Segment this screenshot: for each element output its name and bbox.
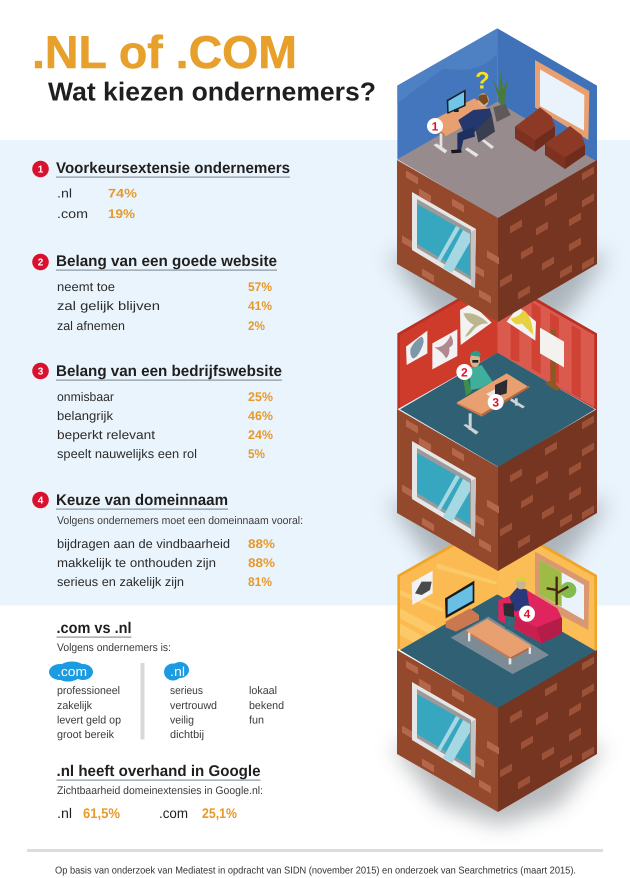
wall art left bbox=[406, 331, 427, 365]
desk bbox=[430, 98, 494, 157]
row belangrijk: 46% bbox=[248, 409, 273, 423]
heading 3: Belang van een bedrijfswebsite bbox=[56, 363, 282, 380]
badge 1 bbox=[32, 161, 49, 177]
row onthouden: 88% bbox=[248, 556, 275, 570]
easel bbox=[540, 328, 564, 391]
row speelt nauwelijks een rol: 5% bbox=[248, 447, 265, 461]
stat .com: 25,1% bbox=[202, 805, 237, 821]
heading Google: .nl heeft overhand in Google bbox=[56, 763, 261, 780]
.nl traits column 2: fun bbox=[249, 714, 264, 726]
row zakelijk bbox=[57, 575, 272, 589]
.com traits: levert geld op bbox=[57, 714, 121, 726]
intro text: Volgens ondernemers moet een domeinnaam vooral: bbox=[57, 515, 303, 527]
section 2: Belang van een goede website bbox=[32, 253, 277, 333]
.nl traits column 1: veilig bbox=[170, 714, 194, 726]
.nl traits column 1: dichtbij bbox=[170, 729, 204, 741]
row vindbaarheid: bijdragen aan de vindbaarheid bbox=[57, 537, 230, 551]
room walls and floor bbox=[397, 276, 597, 467]
row onmisbaar bbox=[57, 390, 273, 404]
row zal afnemen: 2% bbox=[248, 319, 265, 333]
window with tree bbox=[535, 552, 589, 630]
brick base bbox=[397, 650, 597, 812]
row neemt toe bbox=[57, 280, 272, 294]
.com cloud label bbox=[49, 662, 93, 682]
.com traits: zakelijk bbox=[57, 700, 92, 712]
.nl traits column 1: serieus bbox=[170, 685, 203, 697]
cube 2: office with art bbox=[397, 276, 597, 571]
person bbox=[463, 351, 493, 396]
badge 3 bbox=[32, 363, 49, 379]
sofa bbox=[498, 590, 562, 643]
row zakelijk: serieus en zakelijk zijn bbox=[57, 575, 184, 589]
brick base bbox=[397, 160, 597, 322]
row .com: 19% bbox=[108, 207, 135, 221]
title line 1: .NL of .COM bbox=[32, 26, 297, 78]
brick base bbox=[397, 409, 597, 571]
armchair right bbox=[545, 126, 585, 169]
rug bbox=[451, 617, 549, 674]
number marker 4: 4 bbox=[524, 607, 530, 621]
section 1: Voorkeursextensie ondernemers bbox=[32, 160, 290, 221]
footer rule bbox=[27, 849, 603, 852]
number marker 3: 3 bbox=[492, 395, 499, 409]
row onthouden: makkelijk te onthouden zijn bbox=[57, 556, 216, 570]
badge 4 bbox=[32, 492, 49, 508]
.nl traits column 2 bbox=[249, 685, 284, 726]
.com cloud label: .com bbox=[57, 664, 87, 679]
number marker 3 bbox=[488, 394, 504, 410]
.com traits: groot bereik bbox=[57, 729, 114, 741]
.nl traits column 2: bekend bbox=[249, 700, 284, 712]
row zakelijk: 81% bbox=[248, 575, 272, 589]
tv on stand bbox=[445, 581, 479, 632]
intro text: Volgens ondernemers is: bbox=[57, 642, 171, 654]
badge 4: 4 bbox=[38, 496, 44, 506]
section: .nl heeft overhand in Google bbox=[56, 763, 263, 821]
heading .com vs .nl: .com vs .nl bbox=[56, 620, 132, 637]
.nl traits column 1 bbox=[170, 685, 217, 741]
number marker 2 bbox=[456, 364, 472, 380]
number marker 1 bbox=[427, 118, 443, 134]
question mark: ? bbox=[475, 67, 490, 94]
row .nl: .nl bbox=[57, 186, 72, 200]
window bbox=[535, 60, 589, 140]
coffee table bbox=[466, 619, 532, 664]
room walls and floor bbox=[397, 518, 597, 709]
row zal afnemen: zal afnemen bbox=[57, 319, 125, 333]
wall art middle bbox=[432, 329, 457, 369]
title bbox=[32, 26, 376, 106]
row neemt toe: neemt toe bbox=[57, 280, 115, 294]
panel: light blue band bbox=[0, 140, 630, 606]
heading 4: Keuze van domeinnaam bbox=[56, 492, 228, 509]
row .com bbox=[57, 207, 135, 221]
row belangrijk: belangrijk bbox=[57, 409, 114, 423]
person on chair bbox=[451, 93, 495, 153]
row beperkt relevant bbox=[57, 428, 273, 442]
.com traits bbox=[57, 685, 121, 741]
number marker 4 bbox=[519, 606, 535, 622]
row speelt nauwelijks een rol bbox=[57, 447, 265, 461]
monitor bbox=[447, 89, 466, 114]
plant bbox=[493, 70, 511, 122]
heading 1: Voorkeursextensie ondernemers bbox=[56, 160, 290, 177]
section 4: Keuze van domeinnaam bbox=[32, 492, 303, 589]
title line 2: Wat kiezen ondernemers? bbox=[48, 76, 376, 106]
row .com: .com bbox=[57, 207, 88, 221]
footnote: Op basis van onderzoek van Mediatest in opdracht van SIDN (november 2015) en onderzoek van Searchmetrics (maart 2015). bbox=[55, 866, 576, 876]
row beperkt relevant: beperkt relevant bbox=[57, 428, 156, 442]
armchair left bbox=[515, 107, 555, 152]
section: .com vs .nl bbox=[49, 620, 284, 741]
badge 2: 2 bbox=[38, 258, 44, 268]
section 3: Belang van een bedrijfswebsite bbox=[32, 363, 282, 461]
cube 1: blue office bbox=[397, 28, 597, 322]
row zal gelijk blijven: zal gelijk blijven bbox=[57, 299, 160, 313]
row .nl bbox=[57, 186, 137, 200]
badge 2 bbox=[32, 254, 49, 270]
row zal gelijk blijven bbox=[57, 299, 272, 313]
row onmisbaar: onmisbaar bbox=[57, 390, 114, 404]
badge 3: 3 bbox=[38, 366, 44, 378]
stat .com: .com bbox=[159, 805, 188, 821]
wall picture bbox=[412, 571, 433, 605]
.nl cloud label bbox=[164, 662, 189, 680]
.com traits: professioneel bbox=[57, 685, 120, 697]
divider bbox=[140, 663, 144, 740]
number marker 2: 2 bbox=[461, 365, 468, 379]
row onmisbaar: 25% bbox=[248, 390, 273, 404]
row zal gelijk blijven: 41% bbox=[248, 299, 272, 313]
badge 1: 1 bbox=[38, 164, 44, 176]
.nl traits column 1: vertrouwd bbox=[170, 700, 217, 712]
stat .nl: 61,5% bbox=[83, 805, 121, 821]
row belangrijk bbox=[57, 409, 273, 423]
row beperkt relevant: 24% bbox=[248, 428, 273, 442]
stat .nl bbox=[57, 805, 121, 821]
row .nl: 74% bbox=[108, 186, 137, 200]
stat .com bbox=[159, 805, 237, 821]
person with laptop bbox=[503, 577, 529, 632]
row zal afnemen bbox=[57, 319, 265, 333]
row speelt nauwelijks een rol: speelt nauwelijks een rol bbox=[57, 447, 197, 461]
room walls and floor bbox=[397, 28, 597, 219]
.nl traits column 2: lokaal bbox=[249, 685, 277, 697]
cube shadows bbox=[388, 255, 608, 825]
desk bbox=[457, 373, 529, 435]
row vindbaarheid: 88% bbox=[248, 537, 275, 551]
wall art right bbox=[507, 307, 536, 341]
row onthouden bbox=[57, 556, 275, 570]
cube 3: living room bbox=[397, 518, 597, 812]
intro text: Zichtbaarheid domeinextensies in Google.nl: bbox=[57, 785, 263, 797]
row neemt toe: 57% bbox=[248, 280, 272, 294]
wall art top bbox=[460, 303, 492, 345]
.nl cloud label: .nl bbox=[170, 664, 185, 679]
stat .nl: .nl bbox=[57, 805, 72, 821]
number marker 1: 1 bbox=[432, 119, 438, 133]
heading 2: Belang van een goede website bbox=[56, 253, 277, 270]
